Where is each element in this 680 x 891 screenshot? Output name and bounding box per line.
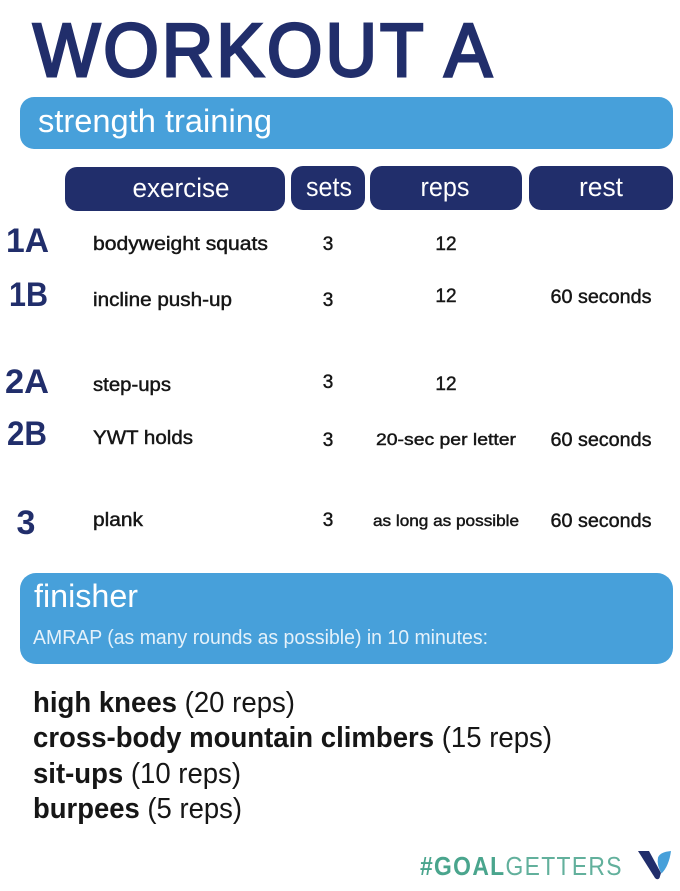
- row 1A: 1A: [6, 222, 49, 260]
- finisher exercise list: cross-body mountain climbers (15 reps): [33, 722, 552, 754]
- row 3: 3: [17, 504, 35, 542]
- panel: finisher banner: [20, 573, 673, 664]
- table header: reps: reps: [420, 172, 470, 202]
- table header: sets: sets: [306, 172, 352, 202]
- row 2A: 12: [435, 374, 457, 395]
- table header: rest: rest: [579, 172, 623, 202]
- finisher exercise list: [33, 687, 552, 825]
- row 1A: bodyweight squats: [93, 234, 268, 255]
- row 1A: [6, 222, 457, 260]
- row 3: [17, 504, 652, 542]
- row 1A: 12: [435, 234, 457, 255]
- finisher exercise list: sit-ups (10 reps): [33, 758, 241, 790]
- table header: exercise: [65, 167, 285, 211]
- finisher exercise list: burpees (5 reps): [33, 793, 242, 825]
- table header: rest: [529, 166, 673, 210]
- row 1B: 3: [323, 290, 333, 311]
- row 2B: YWT holds: [93, 428, 193, 449]
- row 3: 60 seconds: [550, 511, 652, 532]
- hashtag: #GOALGETTERS: [420, 853, 622, 881]
- row 3: plank: [93, 510, 144, 531]
- row 1B: 1B: [9, 276, 48, 314]
- row 2A: 2A: [5, 363, 49, 401]
- row 1B: 12: [435, 286, 457, 307]
- row 1B: incline push-up: [93, 290, 232, 311]
- row 2A: [5, 363, 457, 401]
- panel: strength training banner: [20, 97, 673, 149]
- icon: V logo: [638, 851, 671, 879]
- row 3: 3: [323, 510, 333, 531]
- row 2B: [7, 415, 652, 453]
- row 2A: step-ups: [93, 375, 171, 396]
- table header: reps: [370, 166, 522, 210]
- table header: exercise: exercise: [132, 173, 230, 203]
- row 2B: 20-sec per letter: [376, 430, 516, 449]
- row 2A: 3: [323, 372, 333, 393]
- row 2B: 2B: [7, 415, 47, 453]
- row 1B: [9, 276, 652, 314]
- panel: strength training banner: strength training: [38, 103, 272, 139]
- row 2B: 60 seconds: [550, 430, 652, 451]
- title: WORKOUT A: [33, 9, 492, 92]
- row 2B: 3: [323, 430, 333, 451]
- table header: sets: [291, 166, 365, 210]
- finisher exercise list: high knees (20 reps): [33, 687, 295, 719]
- row 1B: 60 seconds: [550, 287, 652, 308]
- panel: finisher banner: AMRAP (as many rounds as possible) in 10 minutes:: [33, 627, 488, 649]
- row 3: as long as possible: [373, 513, 519, 530]
- row 1A: 3: [323, 234, 333, 255]
- panel: finisher banner: finisher: [34, 578, 138, 614]
